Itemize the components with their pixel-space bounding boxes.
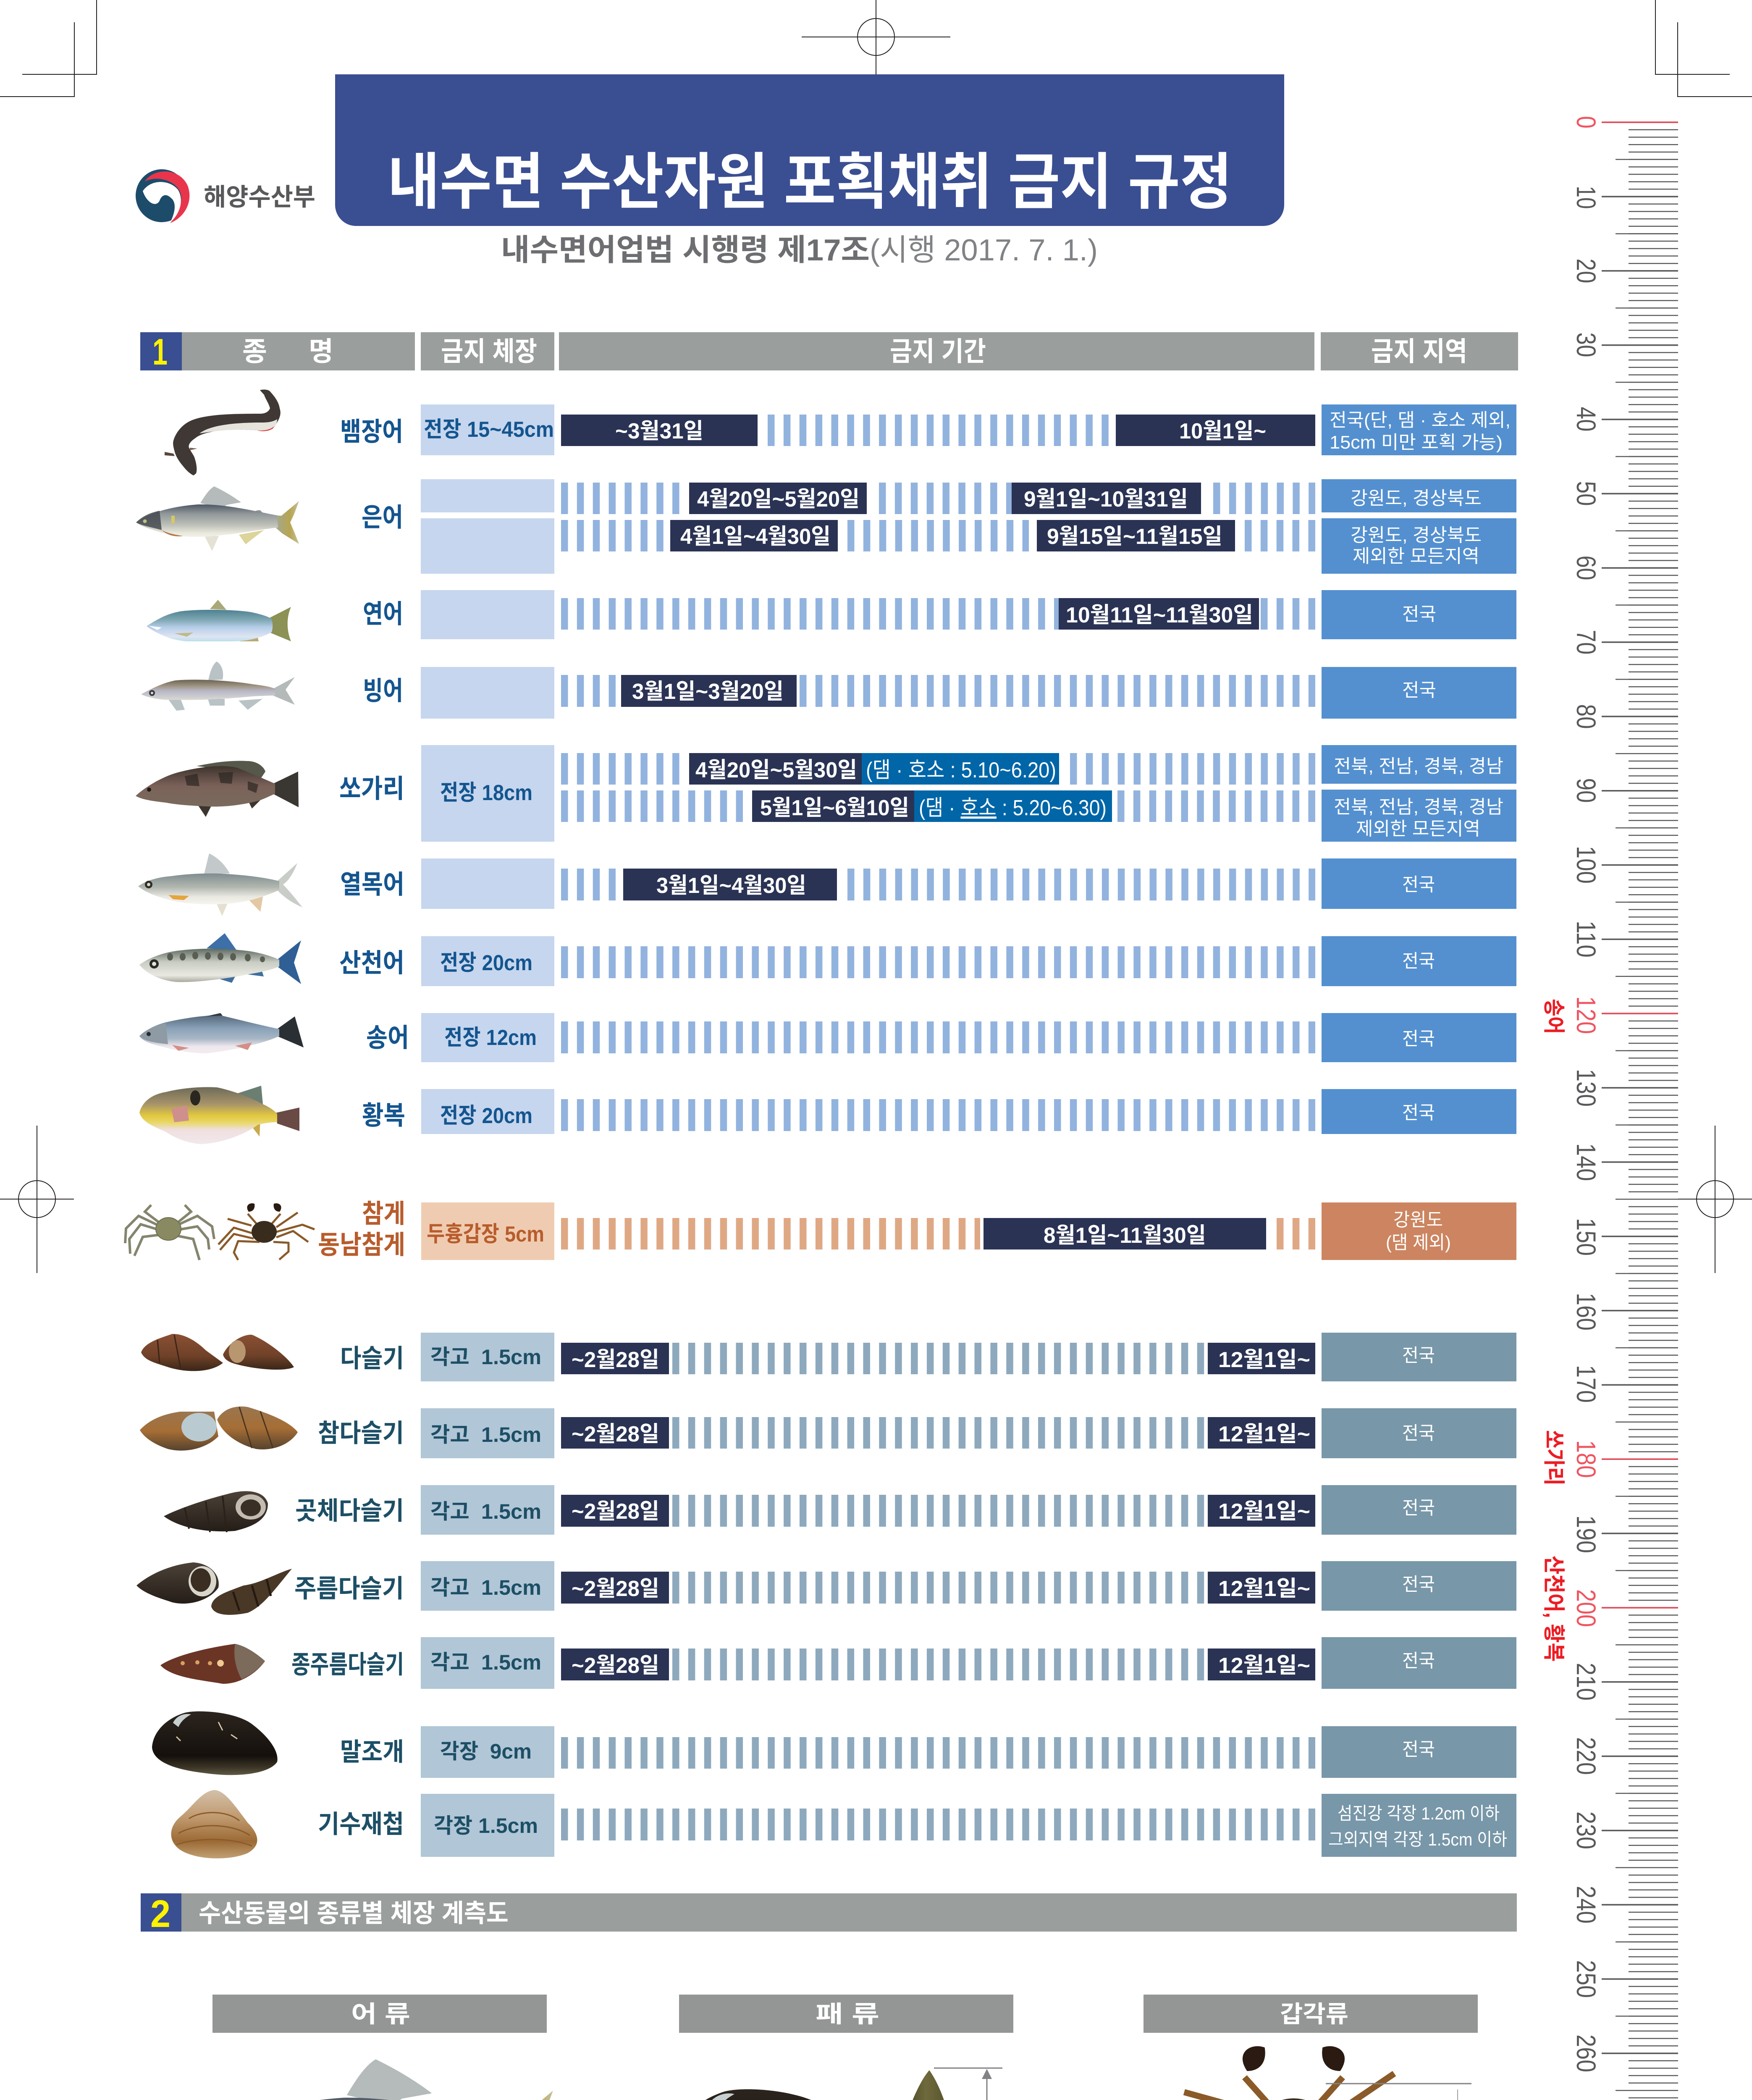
closed period — [561, 675, 1315, 707]
ruler numbers: 20 — [1571, 259, 1601, 283]
row: jongjureum melania — [160, 1637, 1516, 1689]
region: (댐 제외) — [1386, 1232, 1451, 1253]
species name: 산천어 — [339, 949, 404, 978]
region 2: 강원도, 경상북도 — [1351, 525, 1482, 546]
region — [1322, 404, 1516, 455]
region: 전국 — [1402, 951, 1435, 971]
row: true melania — [140, 1407, 1516, 1458]
dimension: carapace length — [1321, 2084, 1490, 2100]
row: crabs — [125, 1200, 1516, 1260]
registration mark: top — [802, 0, 950, 74]
closed period: row 2: 5월1일~6월10일 — [760, 796, 909, 820]
header: size limit: 금지 체장 — [441, 336, 537, 367]
species name: 열목어 — [340, 870, 404, 899]
region: 전국(단, 댐 · 호소 제외, — [1330, 410, 1511, 430]
closed period: 12월1일~ — [1218, 1422, 1310, 1446]
registration mark: right — [1678, 1126, 1752, 1273]
species name: 종주름다슬기 — [291, 1651, 404, 1679]
region — [1322, 1794, 1516, 1857]
closed period — [561, 1417, 1315, 1449]
region 2 — [1322, 518, 1516, 574]
title: 내수면 수산자원 포획채취 금지 규정 — [388, 148, 1232, 216]
icon: mandarin fish — [136, 761, 299, 817]
closed period: 10월1일~ — [1179, 419, 1266, 444]
size limit: 전장 12cm — [444, 1026, 537, 1050]
closed period: 12월1일~ — [1218, 1654, 1310, 1678]
species name: 다슬기 — [340, 1344, 404, 1373]
ruler numbers: 180 — [1571, 1440, 1601, 1478]
region 1: 전북, 전남, 경북, 경남 — [1334, 756, 1503, 777]
size limit: 전장 18cm — [440, 781, 532, 805]
region: 전국 — [1402, 1574, 1435, 1595]
icon: lenok — [138, 853, 302, 916]
species name: 빙어 — [363, 677, 403, 706]
size limit — [421, 745, 554, 842]
region: 전국 — [1402, 1345, 1435, 1366]
closed period: row 1 — [561, 753, 1315, 785]
row: freshwater mussel — [152, 1712, 1516, 1778]
photo: mussel — [674, 2089, 867, 2100]
region: 전국 — [1402, 604, 1436, 625]
species name: mitten crab: 참게 — [362, 1200, 405, 1228]
header: region: 금지 지역 — [1371, 336, 1467, 367]
ruler numbers: 50 — [1571, 481, 1601, 506]
icon: cherry salmon — [139, 933, 301, 984]
row: cherry salmon — [139, 933, 1516, 986]
closed period: row 2: (댐 · 호소 : 5.20~6.30) — [919, 796, 1107, 820]
size limit — [421, 1637, 554, 1689]
photo: snail — [897, 2070, 960, 2100]
region: 전국 — [1402, 1739, 1435, 1760]
species name: 쏘가리 — [339, 774, 404, 803]
ruler numbers: 230 — [1571, 1811, 1601, 1849]
species name: 황복 — [362, 1101, 405, 1130]
size limit — [421, 1408, 554, 1458]
logo: ministry of oceans and fisheries — [136, 169, 315, 223]
closed period: ~2월28일 — [572, 1654, 659, 1678]
ruler numbers: 120 — [1571, 996, 1601, 1034]
icon: jongjureum melania shell — [160, 1644, 265, 1684]
ruler numbers: 220 — [1571, 1737, 1601, 1775]
ruler numbers: 100 — [1571, 846, 1601, 884]
icon: sweetfish — [136, 486, 299, 551]
size limit — [421, 936, 554, 986]
species name: 뱀장어 — [340, 417, 403, 446]
closed period: row 1 — [561, 483, 1315, 514]
size limit: 전장 15~45cm — [424, 417, 554, 442]
size limit — [421, 1202, 554, 1260]
region: 전국 — [1402, 1651, 1435, 1671]
icon: true melania shells — [140, 1407, 298, 1451]
dimension: shell height — [934, 2068, 1012, 2100]
size limit — [421, 1333, 554, 1381]
size limit: 각장 9cm — [440, 1740, 532, 1763]
region 2: 전북, 전남, 경북, 경남 — [1334, 797, 1503, 817]
size limit — [421, 1561, 554, 1611]
ruler numbers: 60 — [1571, 555, 1601, 580]
ruler numbers: 140 — [1571, 1143, 1601, 1181]
panel: fish measurement — [212, 1995, 553, 2100]
closed period: ~2월28일 — [572, 1577, 659, 1601]
region — [1322, 1485, 1516, 1535]
registration mark: left — [0, 1126, 74, 1273]
species name: 연어 — [363, 600, 403, 629]
ruler numbers: 210 — [1571, 1663, 1601, 1701]
species name: 주름다슬기 — [294, 1575, 404, 1603]
closed period — [561, 1648, 1315, 1680]
table header — [140, 331, 1518, 373]
size limit cell — [421, 667, 554, 719]
closed period — [561, 1495, 1315, 1527]
closed period: row 2 — [561, 790, 1315, 822]
region — [1322, 1013, 1516, 1062]
closed period — [561, 1343, 1315, 1374]
closed period: 10월11일~11월30일 — [1066, 603, 1253, 627]
ruler note: cherry salmon, river puffer: 산천어, 황복 — [1541, 1556, 1566, 1662]
ruler numbers: 250 — [1571, 1960, 1601, 1998]
region — [1322, 1089, 1516, 1134]
size limit: 전장 20cm — [440, 951, 532, 975]
ruler numbers: 10 — [1571, 186, 1601, 209]
heading: shellfish — [679, 1995, 1013, 2033]
closed period: 3월1일~3월20일 — [632, 680, 784, 704]
region — [1322, 1202, 1516, 1260]
row: brackish water clam — [171, 1790, 1516, 1858]
size limit: 각고 1.5cm — [430, 1576, 541, 1599]
row: salmon — [147, 590, 1516, 641]
icon: southeastern crab — [218, 1203, 315, 1260]
closed period — [561, 1809, 1315, 1840]
header: closed period: 금지 기간 — [890, 336, 986, 367]
region 1 — [1322, 745, 1516, 784]
size limit — [421, 1726, 554, 1778]
region 2: 제외한 모든지역 — [1356, 819, 1480, 839]
ruler numbers: 90 — [1571, 778, 1601, 803]
section title: 수산동물의 종류별 체장 계측도 — [199, 1899, 509, 1927]
closed period — [561, 415, 1315, 446]
ruler numbers: 150 — [1571, 1218, 1601, 1256]
closed period: ~3월31일 — [615, 419, 703, 444]
ruler numbers: 0 — [1571, 116, 1601, 129]
size limit cells — [421, 479, 554, 574]
closed period: row 2 — [561, 520, 1315, 551]
region: 전국 — [1402, 1498, 1435, 1518]
photo: sweetfish — [212, 2059, 553, 2100]
closed period — [561, 1021, 1315, 1053]
size limit — [421, 1013, 554, 1062]
species name: 참다슬기 — [318, 1419, 404, 1447]
closed period: row 1: 4월20일~5월30일 — [695, 758, 857, 782]
ruler — [1541, 116, 1678, 2100]
species name: 곳체다슬기 — [295, 1497, 404, 1525]
header: size limit — [421, 332, 554, 370]
closed period — [561, 598, 1315, 630]
closed period — [561, 1572, 1315, 1604]
heading: crustaceans: 갑각류 — [1280, 2001, 1348, 2027]
row: mandarin fish — [136, 745, 1516, 842]
icon: gotche melania shell — [164, 1491, 268, 1532]
species name: 송어 — [366, 1024, 409, 1053]
species name: 은어 — [362, 503, 403, 532]
size limit — [421, 1794, 554, 1857]
size limit — [421, 1485, 554, 1535]
row: river puffer — [139, 1086, 1516, 1144]
closed period: 12월1일~ — [1218, 1348, 1310, 1372]
size limit: 각고 1.5cm — [430, 1651, 541, 1674]
region: 그외지역 각장 1.5cm 이하 — [1328, 1830, 1507, 1849]
ruler numbers: 70 — [1571, 630, 1601, 654]
panel: shellfish measurement — [673, 1995, 1013, 2100]
size limit: 각고 1.5cm — [430, 1423, 541, 1446]
region — [1322, 858, 1516, 909]
icon: salmon — [147, 600, 291, 641]
row: wrinkled melania — [136, 1561, 1516, 1615]
header: closed period — [559, 332, 1314, 370]
closed period: row 2: 4월1일~4월30일 — [680, 525, 831, 549]
region: 전국 — [1402, 1102, 1435, 1123]
row: melania — [141, 1333, 1516, 1381]
region 2 — [1322, 790, 1516, 842]
closed period: ~2월28일 — [572, 1422, 659, 1446]
species name: 말조개 — [340, 1738, 404, 1766]
region: 전국 — [1402, 1029, 1435, 1049]
region — [1322, 590, 1516, 639]
icon: pond smelt — [141, 662, 295, 711]
species name: 기수재첩 — [318, 1810, 404, 1838]
icon: clam — [171, 1790, 257, 1858]
region: 전국 — [1402, 874, 1435, 895]
region — [1322, 1408, 1516, 1458]
closed period: 8월1일~11월30일 — [1044, 1223, 1206, 1248]
size limit: 각고 1.5cm — [430, 1500, 541, 1523]
icon: taegeuk — [136, 169, 189, 223]
size limit: 두흉갑장 5cm — [427, 1222, 544, 1247]
title banner — [335, 74, 1284, 226]
species name: southeastern crab: 동남참게 — [318, 1231, 405, 1260]
region — [1322, 1561, 1516, 1611]
ruler numbers: 170 — [1571, 1365, 1601, 1403]
closed period: row 1: (댐 · 호소 : 5.10~6.20) — [866, 758, 1056, 782]
size limit — [421, 1089, 554, 1134]
closed period: ~2월28일 — [572, 1348, 659, 1372]
region: 섬진강 각장 1.2cm 이하 — [1338, 1803, 1500, 1823]
region — [1322, 1726, 1516, 1778]
ruler ticks — [1602, 122, 1678, 2100]
icon: masu salmon — [139, 1013, 304, 1053]
icon: eel — [165, 390, 281, 475]
size limit: 각장 1.5cm — [434, 1814, 538, 1838]
region — [1322, 936, 1516, 986]
panel: crustacean measurement — [1144, 1995, 1490, 2100]
ruler numbers: 260 — [1571, 2034, 1601, 2072]
header: region — [1321, 332, 1518, 370]
region — [1322, 667, 1516, 719]
region 2: 제외한 모든지역 — [1353, 546, 1479, 567]
closed period — [561, 869, 1315, 900]
region: 15cm 미만 포획 가능) — [1330, 432, 1503, 453]
size limit: 각고 1.5cm — [430, 1345, 541, 1369]
ruler numbers — [1571, 116, 1601, 2100]
ministry name: 해양수산부 — [204, 184, 315, 211]
ruler note: masu salmon: 송어 — [1541, 999, 1566, 1034]
size limit: 전장 20cm — [440, 1104, 532, 1128]
closed period — [561, 946, 1315, 978]
closed period — [561, 1218, 1315, 1250]
icon: mitten crab — [125, 1205, 214, 1260]
heading: fish — [212, 1995, 547, 2033]
region: 전국 — [1402, 1423, 1435, 1444]
closed period: ~2월28일 — [572, 1499, 659, 1524]
ruler numbers: 240 — [1571, 1886, 1601, 1924]
heading: fish: 어 류 — [351, 2001, 410, 2027]
ruler numbers: 130 — [1571, 1069, 1601, 1107]
section number 1: 1 — [152, 331, 168, 373]
ruler note: mandarin fish: 쏘가리 — [1541, 1430, 1566, 1486]
ruler numbers: 190 — [1571, 1515, 1601, 1553]
heading: crustaceans — [1144, 1995, 1478, 2033]
row: pond smelt — [141, 662, 1516, 719]
region — [1322, 1637, 1516, 1689]
ruler numbers: 200 — [1571, 1589, 1601, 1627]
heading: shellfish: 패 류 — [816, 2001, 879, 2027]
row: lenok — [138, 853, 1516, 916]
row: eel — [165, 390, 1516, 475]
header: species: 종 — [242, 336, 267, 367]
region 1 — [1322, 479, 1516, 512]
section number 2: 2 — [150, 1893, 170, 1935]
region: 전국 — [1402, 680, 1436, 701]
closed period: row 1: 9월1일~10월31일 — [1024, 487, 1188, 512]
size limit — [421, 404, 554, 455]
ruler numbers: 110 — [1571, 921, 1601, 958]
section 2 heading — [141, 1893, 1517, 1935]
closed period: row 1: 4월20일~5월20일 — [697, 487, 860, 512]
size limit cell — [421, 858, 554, 909]
ruler numbers: 160 — [1571, 1293, 1601, 1331]
closed period: 12월1일~ — [1218, 1499, 1310, 1524]
row: masu salmon — [139, 1013, 1516, 1062]
region 1: 강원도, 경상북도 — [1351, 488, 1482, 509]
icon: melania shells — [141, 1334, 294, 1371]
header: species: 명 — [309, 336, 333, 367]
subtitle: 내수면어업법 시행령 제17조 — [501, 234, 870, 267]
region — [1322, 1333, 1516, 1381]
ruler numbers: 40 — [1571, 407, 1601, 432]
photo: crab — [1157, 2046, 1445, 2100]
row: sweetfish — [136, 479, 1516, 574]
icon: wrinkled melania shells — [136, 1562, 292, 1615]
header: species — [182, 332, 415, 370]
icon: river puffer — [139, 1086, 299, 1144]
icon: freshwater mussel — [152, 1712, 278, 1775]
size limit cell — [421, 590, 554, 639]
row: gotche melania — [164, 1485, 1516, 1535]
subtitle — [501, 234, 1098, 267]
closed period: 3월1일~4월30일 — [656, 874, 806, 898]
ruler numbers: 80 — [1571, 704, 1601, 729]
subtitle: (시행 2017. 7. 1.) — [870, 234, 1098, 267]
closed period — [561, 1737, 1315, 1769]
closed period: 12월1일~ — [1218, 1577, 1310, 1601]
closed period — [561, 1099, 1315, 1131]
region: 강원도 — [1393, 1210, 1443, 1230]
closed period: row 2: 9월15일~11월15일 — [1047, 525, 1222, 549]
ruler numbers: 30 — [1571, 333, 1601, 357]
